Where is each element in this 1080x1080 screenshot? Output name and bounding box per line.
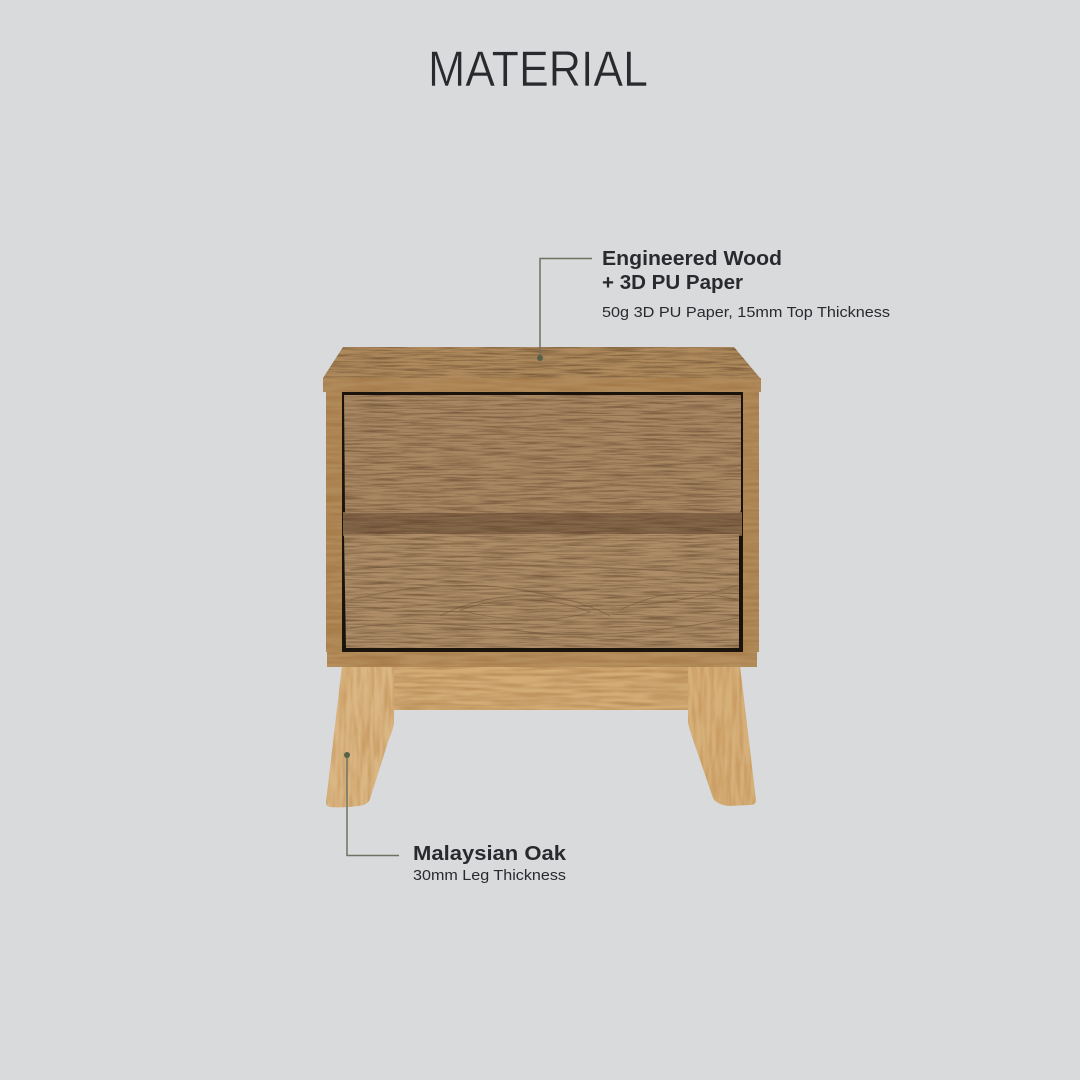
carcass side panels [326,390,342,652]
bottom rail [327,652,757,667]
left leg [326,666,394,807]
callout: engineered wood text [602,247,890,321]
upper drawer front [344,395,741,513]
recess between drawers [343,512,742,536]
dark interior [342,392,743,652]
tabletop front edge [323,378,761,392]
lower drawer cathedral grain [350,565,738,635]
callout: malaysian oak text [413,842,567,884]
title: MATERIAL [428,41,648,97]
callout: engineered wood leader line [537,258,592,361]
callout: malaysian oak text: 30mm Leg Thickness [413,867,566,884]
callout: engineered wood text: Engineered Wood [602,247,782,270]
tabletop surface [323,347,760,378]
callout: engineered wood text: + 3D PU Paper [602,271,743,294]
back apron [392,666,690,710]
right leg [688,666,756,806]
furniture: bedside table [323,347,761,807]
callout: engineered wood text: 50g 3D PU Paper, 15mm Top Thickness [602,304,890,321]
lower drawer front [344,534,739,648]
callout: malaysian oak text: Malaysian Oak [413,842,567,865]
callout: malaysian oak leader line [344,752,399,856]
